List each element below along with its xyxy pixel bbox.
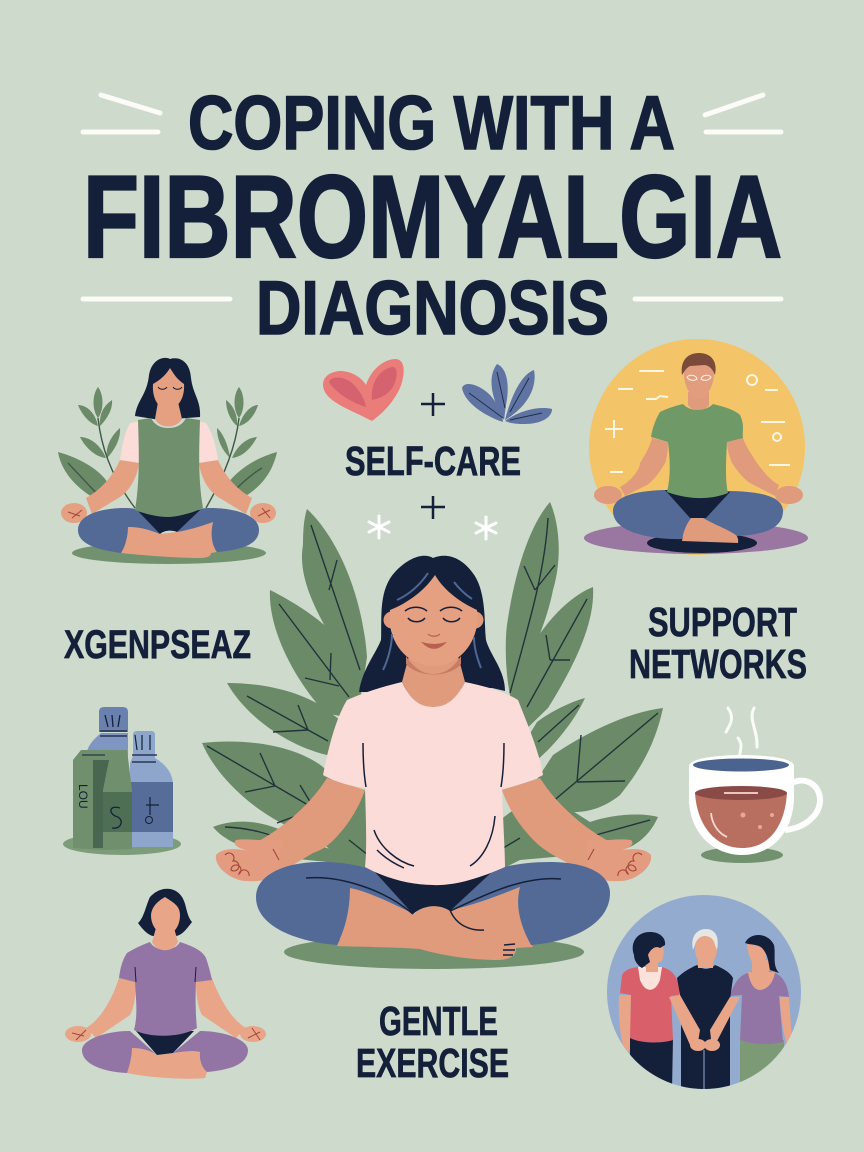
handle xyxy=(785,781,820,830)
saucer shadow xyxy=(701,847,783,863)
label: gentle exercise: GENTLE xyxy=(379,998,498,1044)
legs xyxy=(121,522,217,558)
face xyxy=(153,368,184,409)
hair xyxy=(359,556,505,692)
neck xyxy=(155,402,182,426)
icon: tea cup xyxy=(689,708,820,863)
figure: woman in green top left xyxy=(58,358,277,564)
legs xyxy=(337,887,533,960)
shorts xyxy=(373,870,494,914)
center man xyxy=(669,929,740,1090)
arms xyxy=(245,778,365,877)
shorts xyxy=(137,510,200,534)
face details xyxy=(405,607,462,622)
figure: man on yellow circle top right xyxy=(584,339,808,555)
icon: blue leaves xyxy=(462,364,552,424)
back bottle xyxy=(87,733,128,765)
hair xyxy=(138,889,192,936)
hair xyxy=(135,358,200,420)
mat xyxy=(584,522,808,554)
title: COPING WITH A xyxy=(188,81,675,166)
face xyxy=(151,897,180,935)
icon: medicine bottles xyxy=(63,707,181,855)
ears and face xyxy=(384,612,400,628)
ground xyxy=(63,833,181,855)
green box xyxy=(73,750,132,850)
shorts xyxy=(665,490,730,518)
plus sign top xyxy=(421,393,445,416)
leaves behind central figure xyxy=(202,502,663,870)
white marks xyxy=(605,371,790,472)
sparkles xyxy=(369,516,496,539)
shorts xyxy=(136,1031,194,1055)
neck xyxy=(402,652,465,707)
title: DIAGNOSIS xyxy=(256,266,609,351)
ground shadow xyxy=(284,935,584,969)
shirt xyxy=(651,404,743,498)
body lines xyxy=(306,743,561,955)
arms and hands xyxy=(86,460,139,514)
label: self-care: SELF-CARE xyxy=(345,438,521,484)
front bottle xyxy=(130,731,173,847)
central meditating woman xyxy=(216,556,651,969)
legs xyxy=(127,1048,207,1079)
label: support networks: SUPPORT xyxy=(648,599,797,645)
sleeves xyxy=(120,421,140,463)
icon: medicine bottles: LOU xyxy=(76,784,90,809)
right woman xyxy=(730,935,792,1090)
arms and hands xyxy=(620,438,668,496)
vest xyxy=(135,418,203,517)
neck xyxy=(152,928,178,950)
label: support networks: NETWORKS xyxy=(629,641,807,687)
hair highlights xyxy=(383,573,481,670)
shirt xyxy=(323,682,543,885)
hands xyxy=(216,839,282,881)
cup body xyxy=(689,755,794,855)
steam xyxy=(726,708,757,762)
head xyxy=(684,364,714,399)
neck xyxy=(688,392,709,410)
support group circle xyxy=(607,895,801,1090)
legs and feet xyxy=(682,515,738,543)
label: xgenpseaz: XGENPSEAZ xyxy=(64,623,251,667)
shirt xyxy=(119,942,212,1036)
figure: woman in purple bottom left xyxy=(65,889,266,1079)
title xyxy=(83,81,782,351)
leaf veins xyxy=(207,518,658,855)
icon: heart xyxy=(323,359,404,421)
water surface xyxy=(693,758,789,772)
arms and hands xyxy=(86,978,136,1038)
left woman xyxy=(619,932,680,1090)
yellow circle xyxy=(589,339,805,555)
label: gentle exercise: EXERCISE xyxy=(356,1040,509,1086)
label: gentle exercise xyxy=(356,998,509,1086)
plants xyxy=(58,387,277,500)
ground xyxy=(72,542,266,564)
label: support networks xyxy=(629,599,807,687)
plus sign bottom xyxy=(421,496,445,519)
tea xyxy=(695,787,787,848)
